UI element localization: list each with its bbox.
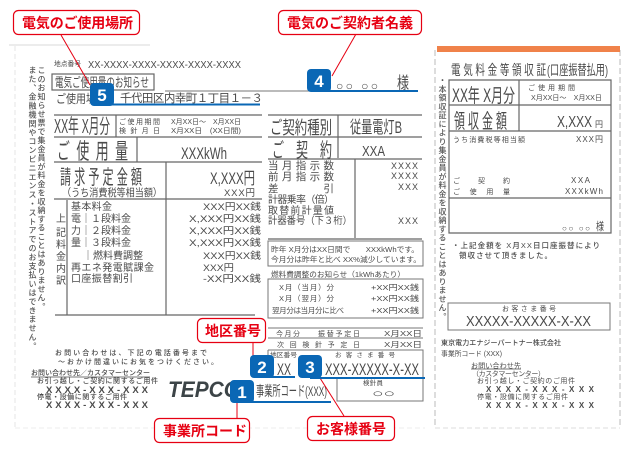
callout: district number xyxy=(198,318,266,356)
transfer and next reading dates xyxy=(268,328,423,349)
billing table left: 訳 xyxy=(56,275,66,287)
receipt company and inquiry info: XXXX-XXX-XXX xyxy=(486,401,595,410)
contract table right: 当月指示数 xyxy=(268,159,334,172)
inquiry guidance: 停電・設備に関するご用件 xyxy=(37,392,127,401)
receipt table: ご 使 用 量 xyxy=(453,187,510,196)
billing table left xyxy=(54,115,262,315)
receipt customer number: XXXXX-XXXXX-X-XX xyxy=(466,313,591,330)
contract table right: XXXX xyxy=(391,161,418,171)
callout: district number: 地区番号 xyxy=(205,323,261,339)
last year comparison xyxy=(268,241,423,266)
receipt company and inquiry info: 停電・設備に関するご用件 xyxy=(477,392,568,401)
billing table left: 内 xyxy=(56,262,66,275)
marker 5 xyxy=(90,83,260,106)
transfer and next reading dates: 今月分 xyxy=(276,329,300,338)
slip heading: 電気ご使用量のお知らせ xyxy=(55,75,149,90)
billing table left: 量｜３段料金 xyxy=(71,236,131,249)
inquiry guidance xyxy=(31,348,218,411)
billing table left: （うち消費税等相当額） xyxy=(62,186,162,199)
transfer and next reading dates: 振替予定日 xyxy=(318,329,360,338)
transfer and next reading dates: 次回検針予定日 xyxy=(277,340,360,349)
last year comparison: 今月分は昨年と比べ XX%減少しています。 xyxy=(271,254,421,264)
transfer and next reading dates: X月XX日 xyxy=(384,329,422,338)
marker 3: 3 xyxy=(305,358,315,377)
marker 2: 2 xyxy=(257,358,267,377)
receipt table: XXXkWh xyxy=(565,187,603,196)
contract table right: ご契約種別 xyxy=(270,118,332,138)
contract table right: 前月指示数 xyxy=(268,170,334,183)
receipt company and inquiry info: 事業所コード (XXX) xyxy=(441,349,502,358)
billing table left: X,XXX円XX銭 xyxy=(189,237,262,249)
billing table left: 請 求 予 定 金 額 xyxy=(60,166,142,189)
vertical notice: right slip: ・本領収証により集金員が料金を収納することはありません。 xyxy=(437,76,448,321)
inquiry guidance: お引っ越し・ご契約に関するご用件 xyxy=(37,376,158,385)
callout: contract holder name xyxy=(278,10,422,76)
billing table left: ｜燃料費調整 xyxy=(83,249,143,262)
billing table left: 料 xyxy=(56,238,66,251)
billing table left: -XX円XX銭 xyxy=(203,273,262,285)
billing table left: X月XX日 (XX日間) xyxy=(171,127,241,135)
callout: customer number: お客様番号 xyxy=(316,421,386,437)
point number: 地点番号 xyxy=(54,59,81,68)
receipt table: X,XXX xyxy=(557,114,592,131)
billing table left: X,XXX円XX銭 xyxy=(189,213,262,225)
panel: receipt slip xyxy=(435,46,620,428)
last year comparison: 昨年 X月分はXX日間で XXXkWhです。 xyxy=(271,244,419,254)
inquiry guidance: XXXX-XXX-XXX xyxy=(46,385,149,396)
contract table right: XXA xyxy=(362,143,385,160)
fuel cost adjustment: X月（翌月）分 xyxy=(279,294,334,303)
billing table left: 口座振替割引 xyxy=(71,272,133,285)
inquiry guidance: お問い合わせは、下記の電話番号まで xyxy=(55,348,207,357)
receipt title: 電 気 料 金 等 領 収 証 xyxy=(451,62,546,78)
receipt company and inquiry info: お問い合わせ先 xyxy=(471,361,521,370)
billing table left: X月XX日～ X月XX日 xyxy=(171,118,241,126)
customer number box: ○○ xyxy=(372,388,395,400)
billing table left: 検針月日 xyxy=(119,126,160,135)
fuel cost adjustment: +XX円XX銭 xyxy=(371,305,420,315)
receipt company and inquiry info: （カスタマーセンター） xyxy=(472,369,545,378)
contract holder name: 様 xyxy=(397,74,409,93)
transfer and next reading dates: X月XX日 xyxy=(384,340,422,349)
fuel cost adjustment: +XX円XX銭 xyxy=(371,282,420,292)
callout: customer number xyxy=(308,378,394,440)
callout: office code xyxy=(154,403,250,442)
billing table left: 記 xyxy=(56,227,66,239)
receipt table: XXX円 xyxy=(576,135,603,144)
TEPCO logo: TEPCO xyxy=(168,377,240,402)
billing table left: XXXkWh xyxy=(181,144,227,163)
customer number box: 地区番号 xyxy=(270,350,298,359)
marker 1 xyxy=(230,380,331,403)
contract holder name: ○○ ○○ xyxy=(336,79,378,93)
fuel cost adjustment: X月（当月）分 xyxy=(279,282,334,292)
contract table right: 取替前計量値 xyxy=(268,204,334,217)
inquiry guidance: ～おかけ間違いにお気をつけください。 xyxy=(58,357,218,366)
contract table right: 差 引 xyxy=(268,182,334,195)
contract table right: XXX xyxy=(398,182,418,192)
receipt note: ・上記金額を X月XX日口座振替により xyxy=(452,240,600,250)
inquiry guidance: お問い合わせ先／カスタマーセンター xyxy=(31,368,150,377)
billing table left: ご 使 用 量 xyxy=(57,139,128,164)
receipt table: XXA xyxy=(571,176,591,185)
fuel cost adjustment: +XX円XX銭 xyxy=(371,293,420,303)
callout: usage location xyxy=(14,10,140,85)
billing table left: 基本料金 xyxy=(71,200,112,213)
contract holder name xyxy=(165,74,409,93)
receipt table: 円 xyxy=(595,120,603,129)
contract table right: XXX xyxy=(398,216,418,226)
usage location: 千代田区内幸町１丁目１－３ xyxy=(120,91,263,105)
office code: 事業所コード(XXX) xyxy=(256,383,327,399)
receipt table: ご使用期間 xyxy=(528,83,575,92)
contract table right xyxy=(268,115,422,239)
marker 4: 4 xyxy=(314,72,324,91)
marker 1: 1 xyxy=(237,383,247,402)
receipt table: うち消費税等相当額 xyxy=(453,135,525,144)
fuel cost adjustment xyxy=(268,269,423,318)
marker 3 xyxy=(298,355,425,378)
contract table right: ご 契 約 xyxy=(272,139,332,162)
billing table left: X,XXX円 xyxy=(210,169,255,188)
billing table left: 金 xyxy=(56,250,66,263)
customer number box: XXX-XXXXX-X-XX xyxy=(325,360,419,379)
billing table left: X,XXX円XX銭 xyxy=(189,225,262,237)
billing table left: XXX円 xyxy=(203,263,234,274)
receipt table: 様 xyxy=(596,219,604,233)
receipt table: X月XX日～ X月XX日 xyxy=(531,94,602,102)
receipt company and inquiry info: 東京電力エナジーパートナー株式会社 xyxy=(441,338,561,347)
receipt table: XX年 X月分 xyxy=(452,85,515,107)
marker 5: 5 xyxy=(97,86,107,105)
inquiry guidance: XXXX-XXX-XXX xyxy=(46,400,149,411)
marker 4 xyxy=(307,69,418,92)
receipt table xyxy=(449,80,611,233)
orange receipt band xyxy=(437,46,620,52)
contract table right: XXXX xyxy=(391,171,418,181)
billing table left: 上 xyxy=(56,213,66,225)
receipt company and inquiry info: お引っ越し・ご契約のご用件 xyxy=(477,376,575,385)
point number: XX-XXXX-XXXX-XXXX-XXXX-XXXX xyxy=(88,60,241,71)
vertical notice: left slip column 2: また、金融機関やコンビニエンス・ストアでのお支払いはできません。 xyxy=(27,66,38,351)
fuel cost adjustment: 燃料費調整のお知らせ（1kWhあたり） xyxy=(271,269,405,279)
billing table left: XXX円 xyxy=(224,188,255,199)
contract table right: 計器番号（下３桁） xyxy=(268,214,352,227)
callout: contract holder name: 電気のご契約者名義 xyxy=(287,15,413,31)
contract table right: 計器乗率（倍） xyxy=(268,194,334,206)
receipt table: 領 収 金 額 xyxy=(454,110,507,133)
usage location: ご使用場所 xyxy=(56,91,106,106)
usage location xyxy=(56,91,263,106)
billing table left: XX年 X月分 xyxy=(54,115,110,138)
slip heading xyxy=(52,74,154,90)
fuel cost adjustment: 翌月分は当月分に比べ xyxy=(272,305,344,315)
customer number box xyxy=(268,350,423,401)
receipt table: ○○ ○○ xyxy=(562,224,590,233)
receipt customer number: お客さま番号 xyxy=(502,304,556,313)
customer number box: 検針員 xyxy=(363,378,384,387)
billing table left: XXX円XX銭 xyxy=(203,250,262,262)
panel: electricity usage notice slip xyxy=(9,45,425,428)
receipt company and inquiry info xyxy=(441,338,595,410)
billing table left: XXX円XX銭 xyxy=(203,201,262,213)
billing table left: 再エネ発電賦課金 xyxy=(71,261,154,274)
billing table left: 力｜２段料金 xyxy=(71,224,131,237)
callout: office code: 事業所コード xyxy=(163,423,247,439)
billing table left: ご使用期間 xyxy=(119,117,160,126)
vertical notice: left slip column 1: このお知らせ票で集金員が料金を収納することはありません。 xyxy=(36,66,47,311)
callout: usage location: 電気のご使用場所 xyxy=(22,15,133,31)
receipt note: 領収させて頂きました。 xyxy=(459,250,552,260)
contract table right: 従量電灯B xyxy=(350,118,402,137)
billing table left: 電｜１段料金 xyxy=(71,212,131,225)
receipt company and inquiry info: XXXX-XXX-XXX xyxy=(486,385,595,394)
customer number box: XX xyxy=(277,360,291,379)
marker 2 xyxy=(250,355,295,378)
receipt table: ご 契 約 xyxy=(453,176,510,185)
receipt note xyxy=(452,240,600,260)
receipt customer number xyxy=(448,303,610,330)
customer number box: お客さま番号 xyxy=(335,350,396,359)
